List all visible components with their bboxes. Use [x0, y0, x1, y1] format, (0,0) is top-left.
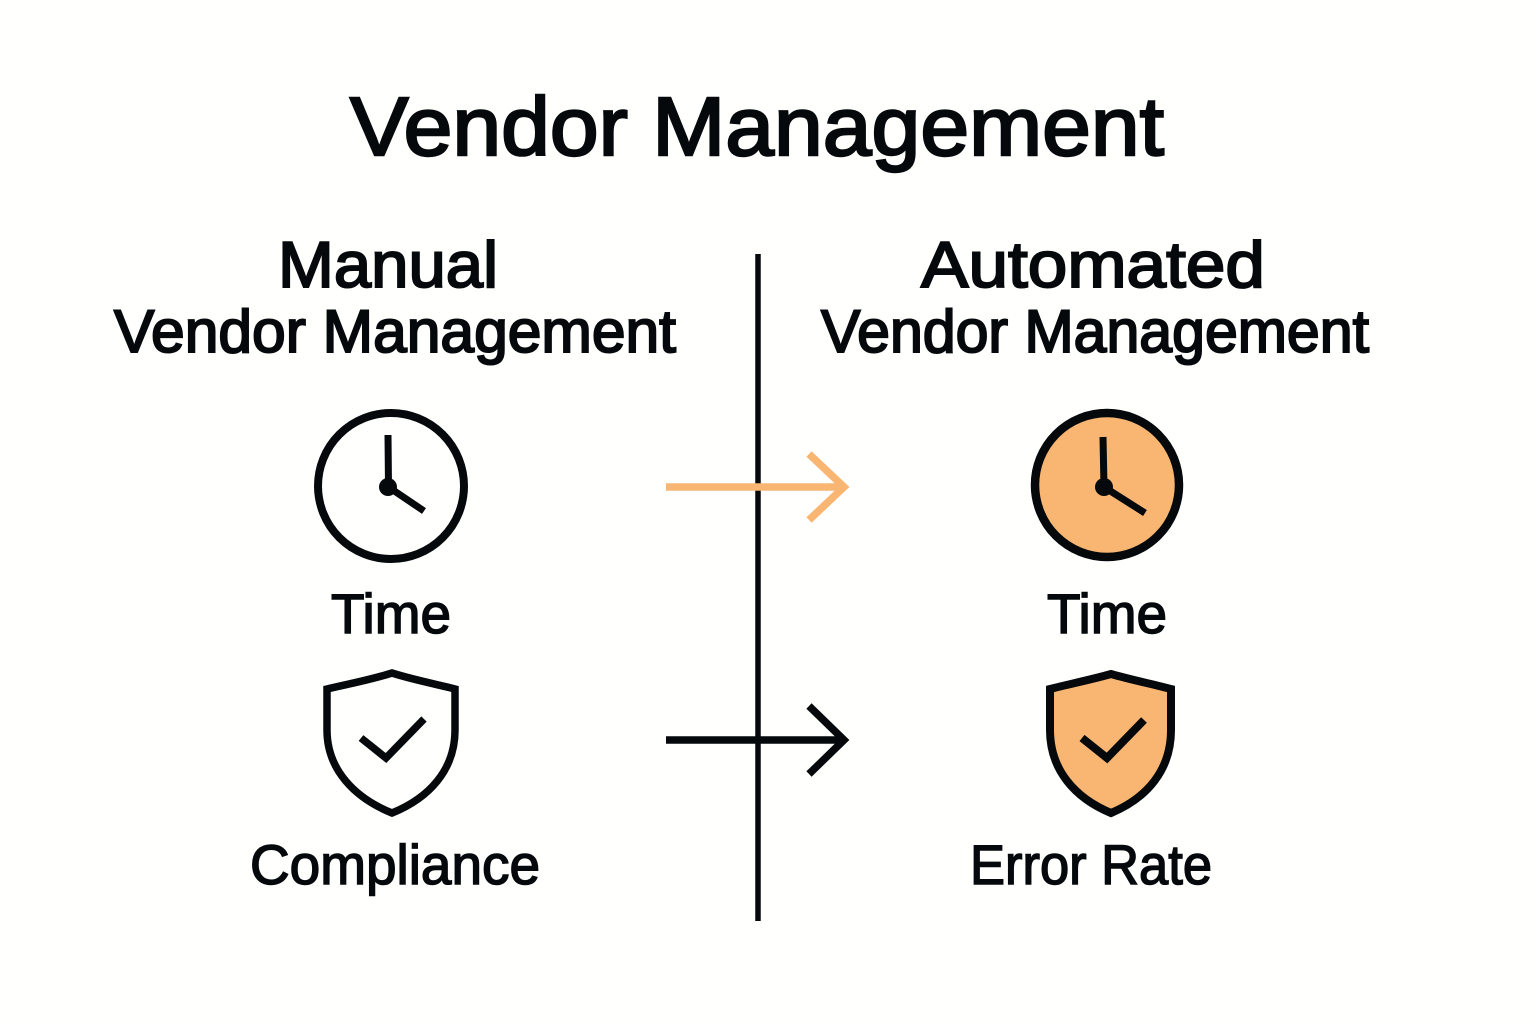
label: compliance: Compliance [250, 833, 540, 896]
center divider [755, 254, 761, 921]
arrow: orange [666, 454, 844, 520]
icon: manual clock [318, 413, 464, 559]
heading: automated: Vendor Management [821, 298, 1369, 365]
label: manual time: Time [331, 582, 451, 645]
icon: compliance shield [327, 673, 455, 813]
arrow: black [666, 706, 844, 774]
icon: automated clock [1035, 413, 1179, 557]
heading: manual: Vendor Management [114, 298, 676, 365]
label: automated time: Time [1047, 582, 1167, 645]
heading: automated: Automated [921, 228, 1265, 301]
icon: error rate shield [1050, 674, 1171, 813]
heading: automated [821, 228, 1369, 365]
heading: manual [114, 228, 676, 365]
title: Vendor Management [350, 80, 1164, 173]
heading: manual: Manual [278, 228, 498, 301]
label: error rate: Error Rate [970, 833, 1212, 896]
